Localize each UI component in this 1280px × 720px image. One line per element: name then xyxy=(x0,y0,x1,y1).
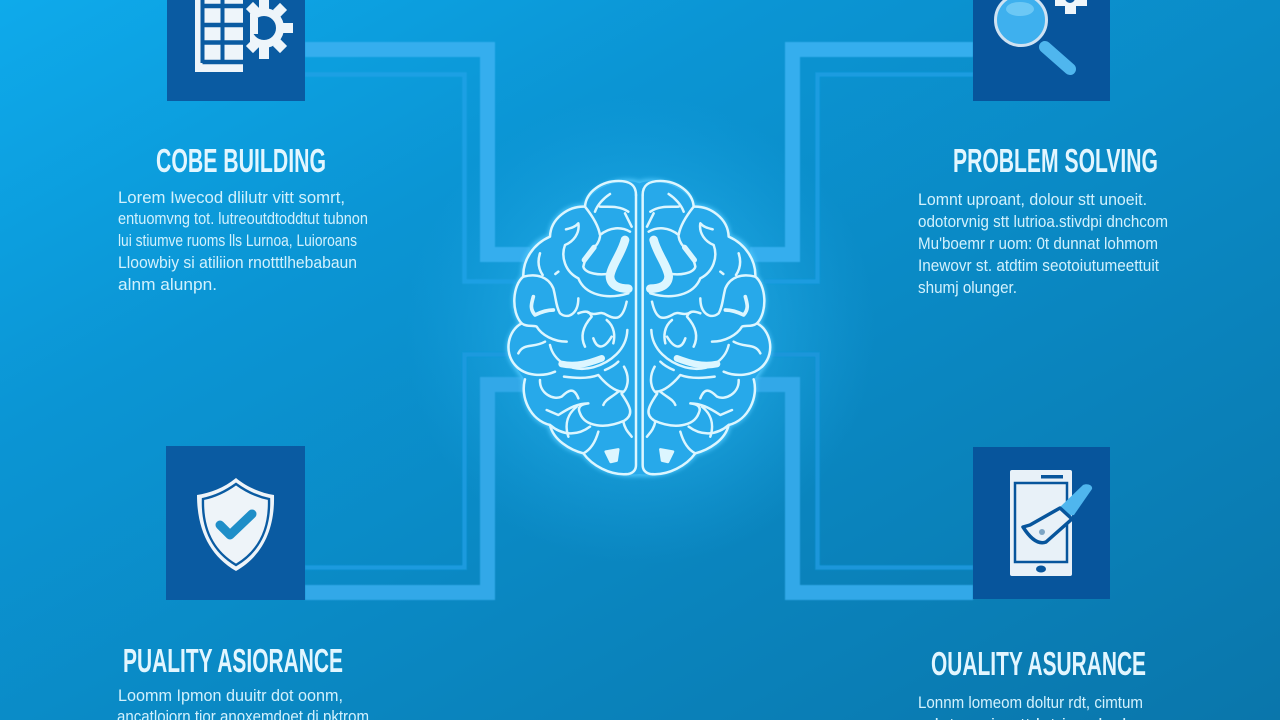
text block: problem solving: odotorvnig stt lutrioa.stivdpi dnchcom xyxy=(918,213,1168,231)
icon: pen xyxy=(1023,484,1092,543)
text block: quality assurance left xyxy=(117,687,369,720)
text block: quality assurance right xyxy=(918,694,1168,720)
text block: problem solving: Lomnt uproant, dolour stt unoeit. xyxy=(918,191,1147,209)
text block: problem solving: Inewovr st. atdtim seotoiutumeettuit xyxy=(918,257,1159,275)
icon: check mark xyxy=(220,514,252,535)
heading: problem solving: PROBLEM SOLVING xyxy=(953,142,1158,179)
connector: bottom left xyxy=(305,354,530,592)
text block: code building: Lorem Iwecod dlilutr vitt somrt, xyxy=(118,189,345,207)
icon panel: code building xyxy=(167,0,305,101)
text block: code building: alnm alunpn. xyxy=(118,276,217,294)
icon: phone xyxy=(1010,470,1072,576)
center glow xyxy=(400,90,880,570)
brain: right hemisphere xyxy=(643,181,770,474)
text block: code building: entuomvng tot. lutreoutdtoddtut tubnon xyxy=(118,210,368,228)
icon: shield xyxy=(197,478,274,571)
connector: bottom right xyxy=(750,354,973,592)
icon: building xyxy=(195,0,243,72)
brain xyxy=(508,181,770,474)
icon panel: quality assurance left xyxy=(166,446,305,600)
text block: code building xyxy=(118,189,368,294)
icon: small gear xyxy=(1055,0,1087,14)
heading: quality assurance left: PUALITY ASIORANCE xyxy=(123,642,343,679)
text block: quality assurance left: Loomm Ipmon duuitr dot oonm, xyxy=(118,687,343,705)
text block: code building: lui stiumve ruoms lls Lurnoa, Luioroans xyxy=(118,232,357,250)
heading: code building: COBE BUILDING xyxy=(156,142,326,179)
icon: magnifier xyxy=(996,0,1070,69)
text block: quality assurance right: Lonnm lomeom doltur rdt, cimtum xyxy=(918,694,1143,712)
brain glow xyxy=(509,181,770,474)
connector: top left xyxy=(305,50,530,282)
text block: problem solving: shumj olunger. xyxy=(918,279,1017,297)
icon: gear xyxy=(243,0,293,59)
icon panel: problem solving xyxy=(973,0,1110,101)
text block: problem solving xyxy=(918,191,1168,297)
icon panel: quality assurance right xyxy=(973,447,1110,599)
brain fill xyxy=(509,181,770,474)
heading: quality assurance right: OUALITY ASURANCE xyxy=(931,645,1146,682)
text block: problem solving: Mu'boemr r uom: 0t dunnat lohmom xyxy=(918,235,1158,253)
connector: top right xyxy=(750,50,973,282)
text block: code building: Lloowbiy si atiliion rnotttlhebabaun xyxy=(118,254,357,272)
brain: left hemisphere xyxy=(508,181,636,474)
